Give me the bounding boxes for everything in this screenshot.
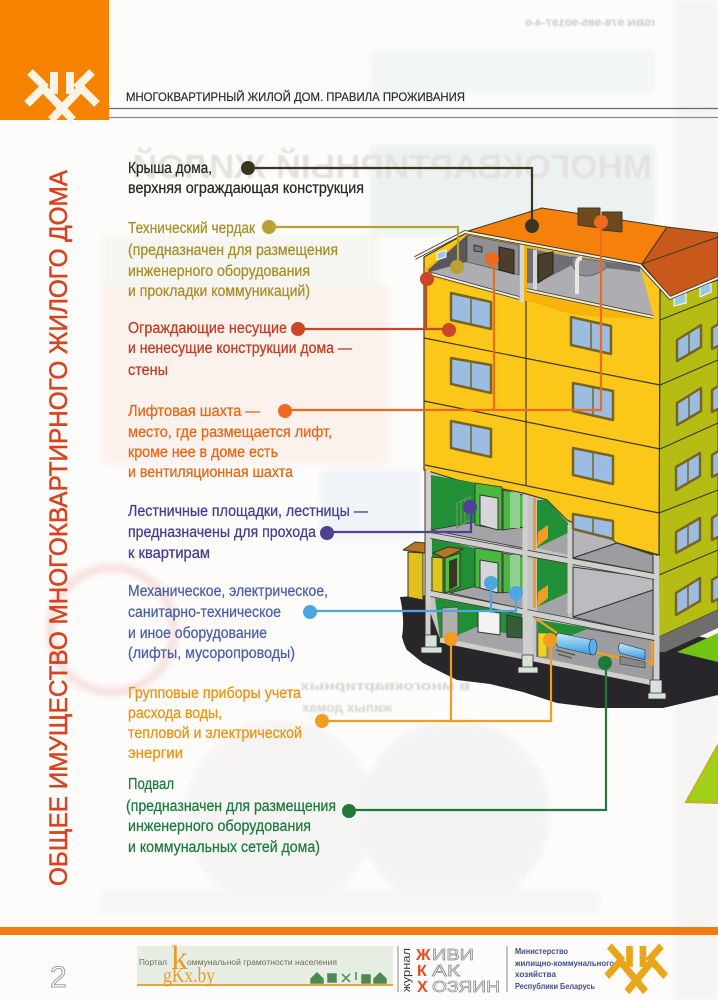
- column feet: [421, 635, 666, 699]
- middle bay rooms: [533, 498, 568, 618]
- ground: [400, 595, 718, 708]
- callout: attic: (предназначен для размещения: [128, 242, 338, 259]
- footer ministry text: хозяйства: [515, 969, 556, 979]
- right bay rooms: [573, 527, 653, 635]
- footer magazine logo: ИВИ: [432, 947, 474, 964]
- callout: attic: Технический чердак: [128, 220, 255, 237]
- callout: roof: верхняя ограждающая конструкция: [128, 180, 364, 197]
- upper left bay: [431, 475, 523, 548]
- side vents: [674, 283, 711, 306]
- basement column: [523, 613, 533, 657]
- front floor lines: [424, 295, 660, 513]
- callout: elevator shaft: [128, 215, 608, 481]
- footer portal banner: [137, 940, 393, 987]
- logo: white emblem: [27, 72, 97, 120]
- footer portal banner: Портал: [139, 957, 167, 967]
- basement: [435, 598, 653, 683]
- callout: walls: [128, 272, 456, 379]
- callout: walls: стены: [128, 362, 168, 379]
- callout: roof: [128, 160, 539, 233]
- callout: equipment: [128, 576, 523, 662]
- callout: stairs: Лестничные площадки, лестницы —: [128, 503, 368, 520]
- columns: [428, 470, 657, 682]
- callout: meters: Групповые приборы учета: [128, 685, 301, 702]
- footer ministry text: жилищно-коммунального: [514, 958, 614, 968]
- callout: basement: [126, 656, 612, 856]
- page number: 2: [50, 961, 67, 994]
- callout: elevator shaft: и вентиляционная шахта: [128, 464, 293, 481]
- pipes and boilers: [535, 618, 652, 665]
- footer magazine logo: АК: [432, 963, 461, 980]
- footer magazine logo: Ж: [415, 947, 431, 964]
- callout: meters: тепловой и электрической: [128, 725, 302, 742]
- callout: meters: [128, 632, 557, 762]
- show-through ghost of the reverse page: МНОГОКВАРТИРНЫЙ ЖИЛОЙ: [132, 147, 652, 185]
- footer portal banner: k: [171, 940, 188, 977]
- front wall: [424, 232, 660, 555]
- callout: equipment: Механическое, электрическое,: [128, 583, 328, 600]
- callout: roof: Крыша дома,: [128, 160, 212, 177]
- lawn: [677, 633, 718, 662]
- callout: attic: [128, 220, 464, 300]
- footer magazine logo: Х: [417, 979, 428, 996]
- footer portal banner: gKx.by: [163, 963, 215, 987]
- show-through ghost of the reverse page: жилых домах: [301, 700, 393, 715]
- callout: equipment: и иное оборудование: [128, 625, 267, 642]
- footer magazine logo: журнал: [401, 948, 413, 992]
- bottom-right corner triangle: [686, 745, 718, 803]
- callout: equipment: (лифты, мусоропроводы): [128, 645, 295, 662]
- attic: [424, 234, 654, 318]
- footer portal banner: оммунальной грамотности населения: [187, 957, 337, 967]
- footer ministry text: [507, 946, 614, 992]
- show-through ghost of the reverse page: ISBN 978-985-90197-4-0: [525, 18, 655, 28]
- side wall: [659, 279, 718, 637]
- side floor lines: [659, 297, 718, 575]
- side plinth: [659, 610, 718, 652]
- callout: elevator shaft: кроме нее в доме есть: [128, 444, 278, 461]
- footer magazine logo: К: [417, 963, 427, 980]
- callout: walls: и ненесущие конструкции дома —: [128, 340, 352, 357]
- callout: basement: инженерного оборудования: [128, 818, 311, 835]
- icons row: [311, 972, 386, 983]
- footer ministry text: Республики Беларусь: [515, 981, 595, 991]
- callout: meters: энергии: [128, 745, 183, 762]
- callout: stairs: к квартирам: [128, 545, 210, 562]
- show-through ghost of the reverse page: в многоквартирных: [299, 678, 470, 693]
- callout: basement: (предназначен для размещения: [126, 798, 336, 815]
- callout: elevator shaft: Лифтовая шахта —: [128, 403, 260, 420]
- header rules: [109, 108, 718, 110]
- callout: elevator shaft: место, где размещается лифт,: [128, 424, 332, 441]
- callout: basement: Подвал: [128, 776, 174, 793]
- callout: stairs: [128, 500, 477, 562]
- front windows: [451, 293, 613, 539]
- footer magazine logo: [398, 946, 500, 996]
- lower left bay: [403, 538, 523, 609]
- footer orange band: [0, 927, 718, 935]
- side windows: [676, 323, 718, 615]
- floor slabs: [428, 535, 657, 683]
- callout: attic: и прокладки коммуникаций): [128, 283, 310, 300]
- callout: stairs: предназначены для прохода: [128, 524, 316, 541]
- interior cutaway background: [425, 470, 657, 684]
- footer orange emblem: [607, 946, 666, 992]
- callout: basement: и коммунальных сетей дома): [128, 839, 320, 856]
- callout: walls: Ограждающие несущие: [128, 320, 287, 337]
- callout: equipment: санитарно-техническое: [128, 604, 281, 621]
- callout: attic: инженерного оборудования: [128, 263, 310, 280]
- footer magazine logo: ОЗЯИН: [432, 979, 500, 996]
- callout: meters: расхода воды,: [128, 705, 222, 722]
- roof: [415, 208, 718, 298]
- header title: МНОГОКВАРТИРНЫЙ ЖИЛОЙ ДОМ. ПРАВИЛА ПРОЖИВАНИЯ: [126, 89, 465, 104]
- header orange block: [0, 0, 109, 120]
- footer ministry text: Министерство: [515, 946, 568, 956]
- illustration: apartment building: [400, 208, 718, 708]
- vertical heading: ОБЩЕЕ ИМУЩЕСТВО МНОГОКВАРТИРНОГО ЖИЛОГО ДОМА: [45, 170, 73, 886]
